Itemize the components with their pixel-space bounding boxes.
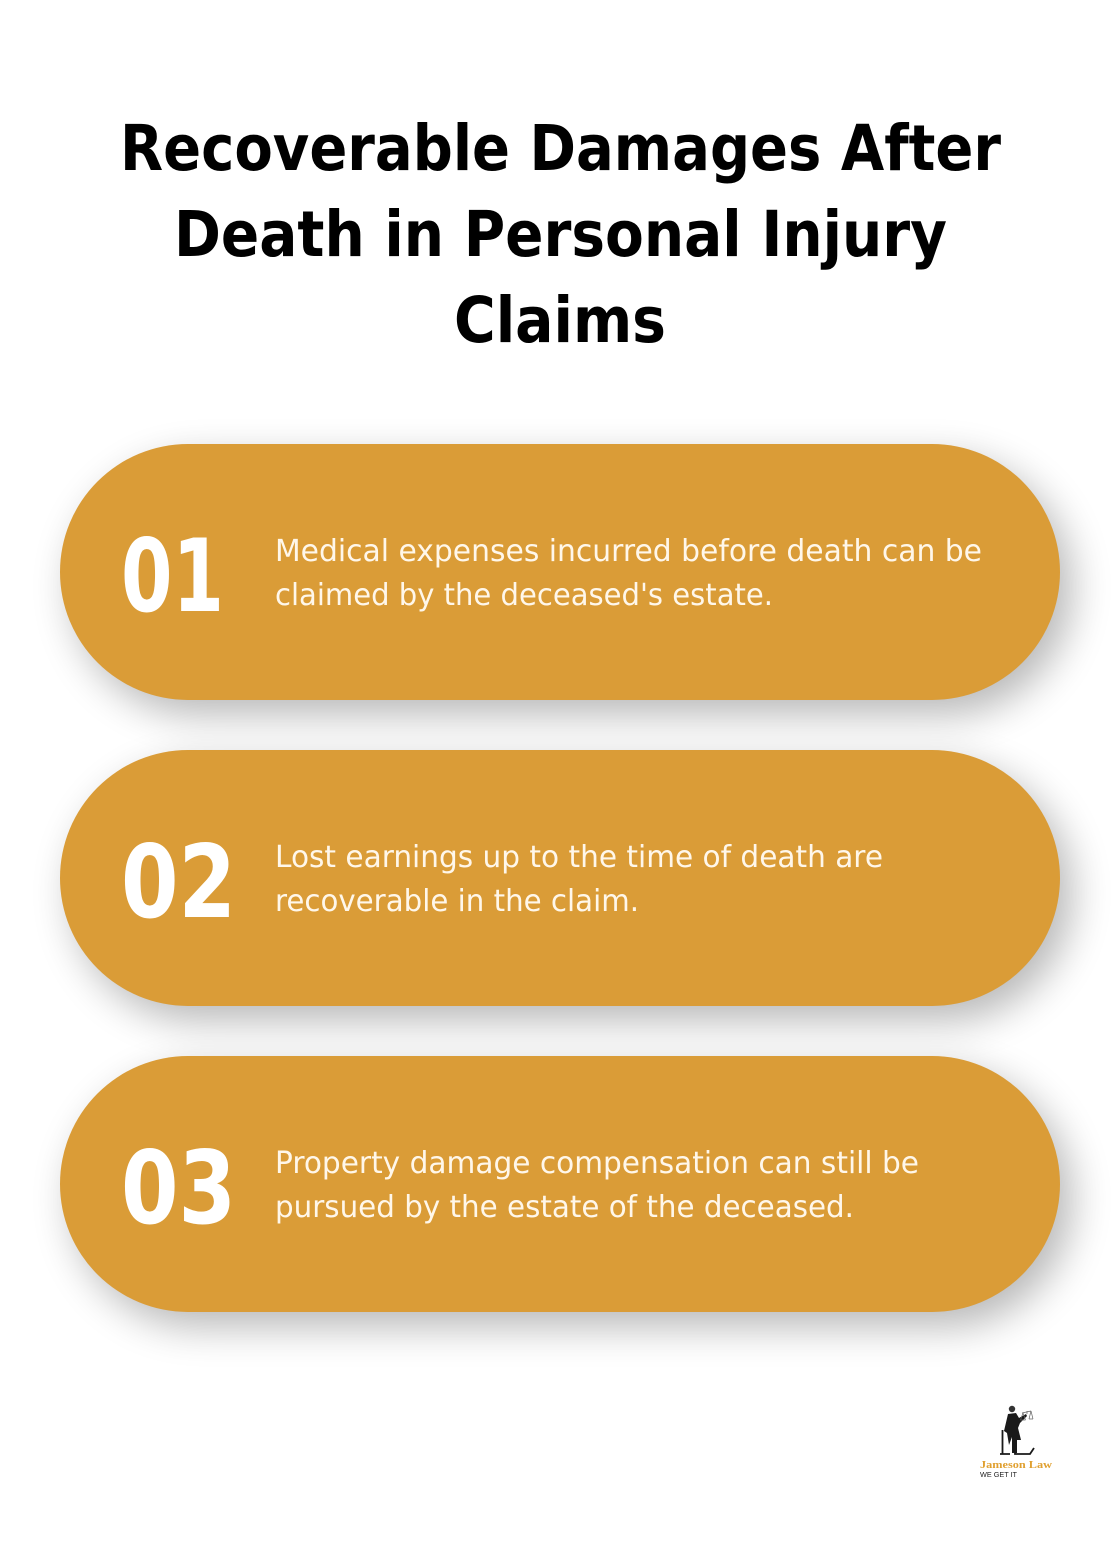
text: item 01 (275, 534, 982, 613)
icon: lady justice (1000, 1406, 1034, 1454)
title (120, 112, 1001, 357)
text: item 03: pursued by the estate of the deceased. (275, 1190, 854, 1225)
panel: item 01 (60, 444, 1072, 715)
text: item 03 (275, 1146, 919, 1225)
panel: item 03 (60, 1056, 1072, 1327)
title: Claims (454, 284, 666, 357)
title: Death in Personal Injury (174, 198, 947, 271)
number 01: 01 (121, 517, 224, 635)
text: item 02: Lost earnings up to the time of death are (275, 840, 883, 875)
text: item 02 (275, 840, 883, 919)
title: Recoverable Damages After (120, 112, 1001, 185)
text: item 01: claimed by the deceased's estate. (275, 578, 773, 613)
panel: item 02 (60, 750, 1072, 1021)
text: item 03: Property damage compensation can still be (275, 1146, 919, 1181)
text: item 02: recoverable in the claim. (275, 884, 639, 919)
logo name: Jameson Law (980, 1459, 1052, 1471)
text: item 01: Medical expenses incurred before death can be (275, 534, 982, 569)
number 03: 03 (121, 1129, 236, 1247)
number 02: 02 (121, 823, 236, 941)
logo: Jameson Law (980, 1406, 1052, 1479)
logo tagline: WE GET IT (980, 1472, 1018, 1479)
